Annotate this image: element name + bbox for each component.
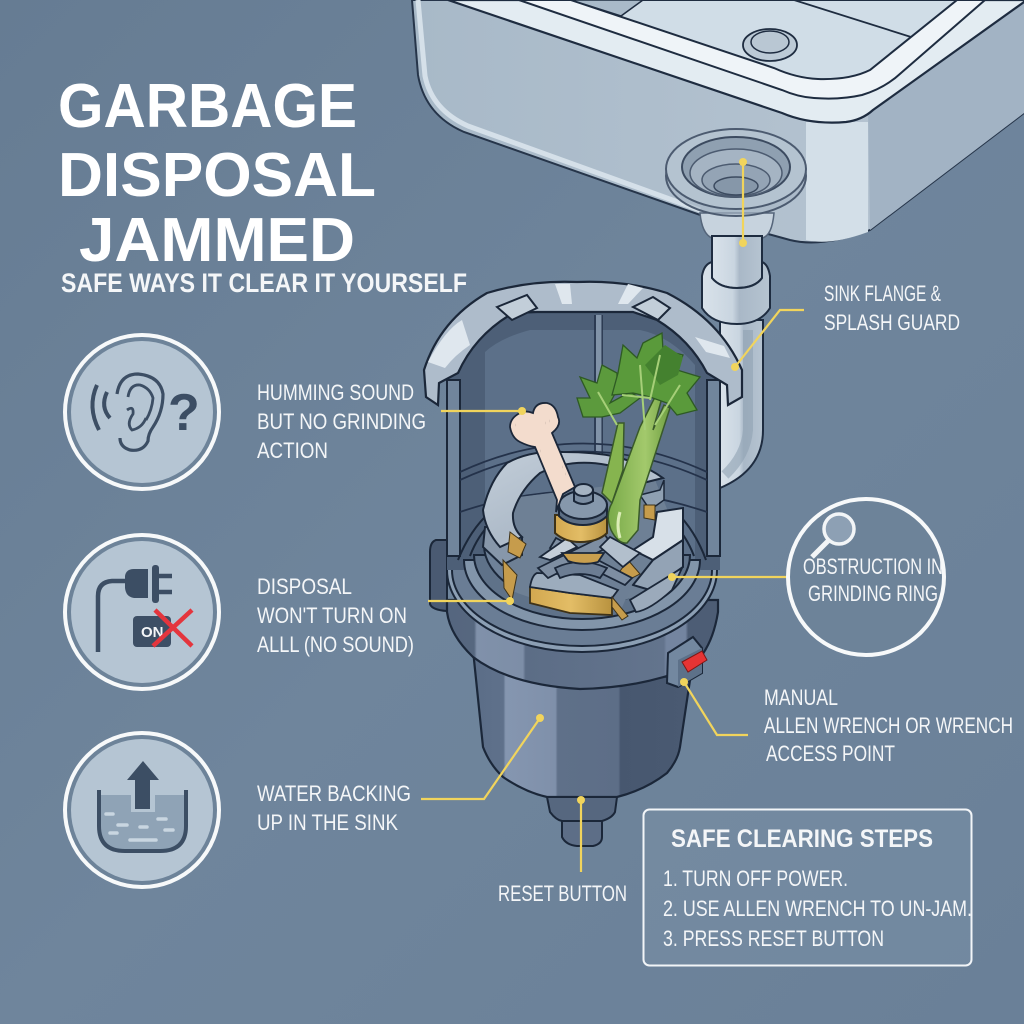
panel: safe clearing steps: SAFE CLEARING STEPS — [671, 825, 933, 853]
callout: water backing: UP IN THE SINK — [257, 810, 398, 835]
icon: water rising arrow — [65, 733, 219, 887]
panel: safe clearing steps: 1. TURN OFF POWER. — [663, 866, 848, 891]
hub — [555, 484, 607, 542]
icon: ear with sound waves: ? — [168, 384, 200, 442]
title — [58, 72, 376, 275]
brass lower block — [530, 573, 628, 620]
icon: plug and off switch: ON — [141, 624, 164, 641]
callout: sink flange: SINK FLANGE & — [824, 281, 941, 306]
grinding ring — [483, 452, 683, 612]
callout circle: obstruction: OBSTRUCTION IN — [803, 554, 943, 579]
title: DISPOSAL — [58, 141, 376, 210]
callout: water backing: WATER BACKING — [257, 781, 411, 806]
bone — [510, 403, 575, 512]
brass blocks — [503, 505, 655, 600]
left side tab — [430, 540, 447, 611]
callout: reset button: RESET BUTTON — [498, 881, 627, 906]
callout: won't turn on: WON'T TURN ON — [257, 603, 407, 628]
callout: won't turn on: DISPOSAL — [257, 574, 352, 599]
blades — [538, 535, 640, 585]
shoulder — [447, 600, 718, 689]
icon: plug and off switch — [65, 535, 219, 689]
top rim collar — [424, 282, 742, 405]
callout: manual access: MANUAL — [764, 685, 838, 710]
callout: won't turn on — [257, 574, 414, 657]
disposal unit — [424, 282, 742, 846]
celery — [577, 333, 700, 543]
clear housing — [447, 313, 720, 570]
sink basin — [412, 0, 1024, 242]
callout: humming — [257, 380, 426, 463]
callout: humming: HUMMING SOUND — [257, 380, 414, 405]
panel: safe clearing steps — [644, 810, 972, 966]
callout: sink flange — [824, 281, 960, 335]
panel: safe clearing steps: 3. PRESS RESET BUTTON — [663, 926, 884, 951]
callout: water backing — [257, 781, 411, 835]
yellow callout lines — [421, 158, 804, 872]
icon: ear with sound waves — [65, 335, 219, 489]
callout: won't turn on: ALLL (NO SOUND) — [257, 632, 414, 657]
title: GARBAGE — [58, 72, 357, 141]
callout: sink flange: SPLASH GUARD — [824, 310, 960, 335]
manual access switch — [667, 637, 707, 687]
callout: humming: BUT NO GRINDING — [257, 409, 426, 434]
callout: manual access — [764, 685, 1013, 766]
subtitle: SAFE WAYS IT CLEAR IT YOURSELF — [61, 268, 467, 298]
celery leaves — [577, 365, 640, 417]
callout: humming: ACTION — [257, 438, 328, 463]
sink flange — [666, 129, 806, 216]
callout circle: obstruction: GRINDING RING — [808, 581, 938, 606]
lower cup — [473, 650, 690, 797]
title: JAMMED — [79, 206, 355, 275]
icon: drain button — [743, 29, 797, 61]
drain nub — [547, 797, 617, 846]
callout: manual access: ACCESS POINT — [766, 741, 895, 766]
callout circle: obstruction — [788, 499, 944, 655]
drain pipe — [700, 213, 774, 488]
base rings — [447, 512, 717, 652]
